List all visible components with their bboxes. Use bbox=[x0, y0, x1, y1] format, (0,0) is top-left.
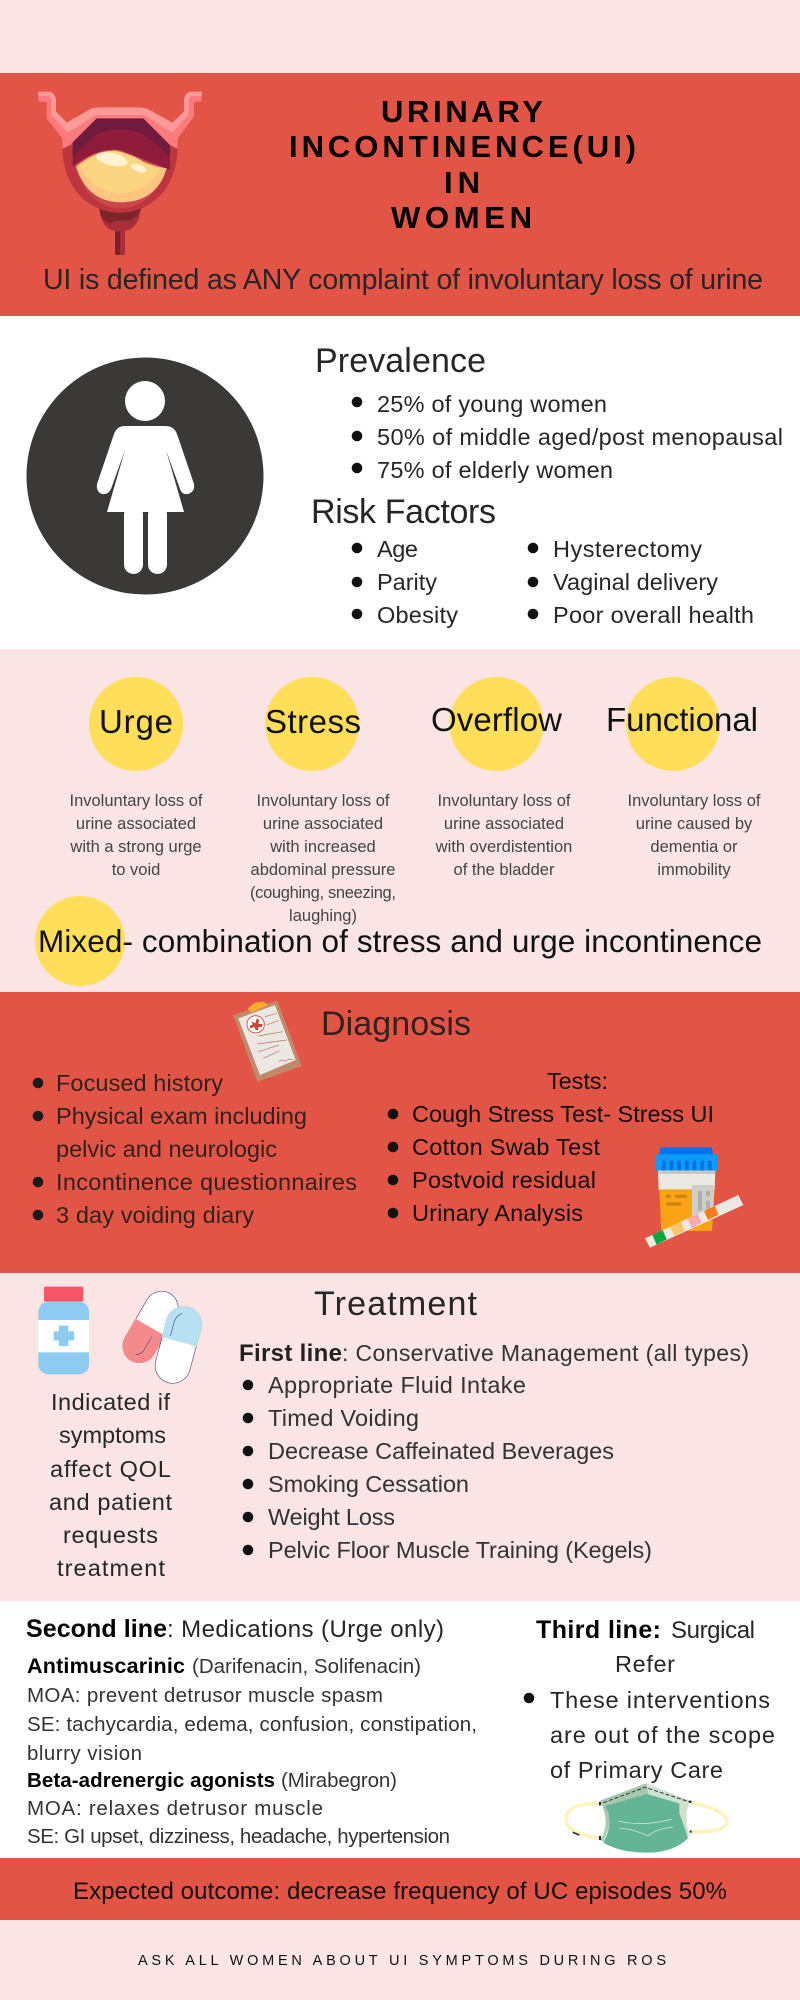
list: risk factors: Parity bbox=[377, 569, 437, 595]
third line: surgical refer: of Primary Care bbox=[550, 1757, 723, 1783]
text: indication for treatment: treatment bbox=[57, 1555, 165, 1581]
type: stress: with increased bbox=[269, 838, 376, 856]
icon: bladder bbox=[38, 92, 202, 255]
third line: surgical refer bbox=[524, 1616, 775, 1783]
type: urge: urine associated bbox=[76, 815, 196, 833]
type: stress bbox=[250, 677, 396, 925]
list: risk factors: Hysterectomy bbox=[553, 536, 702, 562]
type: functional: Functional bbox=[606, 701, 758, 738]
panel: title header bbox=[0, 73, 800, 316]
second line: medications: Second line bbox=[26, 1615, 167, 1643]
icon: medicine bottle bbox=[38, 1287, 89, 1374]
heading: diagnosis: Diagnosis bbox=[321, 1005, 471, 1043]
type: urge: Involuntary loss of bbox=[70, 792, 203, 810]
text: indication for treatment: Indicated if bbox=[51, 1389, 170, 1415]
title: WOMEN bbox=[391, 200, 532, 235]
type: urge: with a strong urge bbox=[69, 838, 202, 856]
third line: surgical refer: Surgical bbox=[671, 1617, 755, 1644]
list: tests: Cotton Swab Test bbox=[412, 1134, 600, 1160]
icon: urine cup with test strip bbox=[645, 1147, 743, 1248]
list: first line treatments: Appropriate Fluid Intake bbox=[268, 1372, 526, 1398]
type: overflow: Overflow bbox=[431, 701, 562, 738]
type: functional: urine caused by bbox=[636, 815, 753, 833]
panel: diagnosis bbox=[0, 992, 800, 1273]
type: urge: Urge bbox=[99, 703, 173, 740]
list: diagnosis steps: Incontinence questionnaires bbox=[56, 1169, 357, 1195]
type: overflow: urine associated bbox=[444, 815, 564, 833]
type: stress: (coughing, sneezing, bbox=[250, 884, 396, 902]
list: diagnosis steps: pelvic and neurologic bbox=[56, 1136, 277, 1162]
heading: treatment: Treatment bbox=[314, 1285, 478, 1323]
list: risk factors: Obesity bbox=[377, 602, 458, 628]
list: tests: Cough Stress Test- Stress UI bbox=[412, 1101, 714, 1127]
list: first line treatments bbox=[243, 1372, 652, 1563]
type: functional: Involuntary loss of bbox=[628, 792, 761, 810]
list: tests: Urinary Analysis bbox=[412, 1200, 583, 1226]
third line: surgical refer: These interventions bbox=[550, 1687, 770, 1713]
second line: medications: : Medications (Urge only) bbox=[167, 1616, 444, 1643]
second line: medications: SE: tachycardia, edema, confusion, constipation, bbox=[27, 1713, 477, 1736]
list: risk factors bbox=[352, 536, 754, 628]
third line: surgical refer: Third line: bbox=[536, 1616, 661, 1644]
third line: surgical refer: Refer bbox=[615, 1651, 675, 1677]
list: prevalence: 25% of young women bbox=[377, 391, 607, 417]
text: indication for treatment: affect QOL bbox=[50, 1456, 171, 1482]
list: diagnosis steps: Focused history bbox=[56, 1070, 223, 1096]
text: indication for treatment: requests bbox=[63, 1522, 158, 1548]
type: overflow: with overdistention bbox=[435, 838, 572, 856]
list: diagnosis steps: Physical exam including bbox=[56, 1103, 307, 1129]
list: prevalence: 50% of middle aged/post menopausal bbox=[377, 424, 783, 450]
type: urge: to void bbox=[112, 861, 160, 879]
second line: medications bbox=[26, 1615, 477, 1848]
type: stress: Involuntary loss of bbox=[257, 792, 390, 810]
type: stress: laughing) bbox=[289, 907, 357, 925]
icon: capsules bbox=[116, 1285, 206, 1387]
first line heading: First line bbox=[239, 1340, 342, 1367]
panel: footer bbox=[0, 1920, 800, 2000]
second line: medications: MOA: relaxes detrusor muscle bbox=[27, 1797, 323, 1820]
panel: second and third line treatment bbox=[0, 1601, 800, 1858]
text: indication for treatment: and patient bbox=[49, 1489, 172, 1515]
second line: medications: Beta-adrenergic agonists bbox=[27, 1769, 275, 1792]
type: functional: dementia or bbox=[650, 838, 738, 856]
text: indication for treatment: symptoms bbox=[59, 1422, 166, 1448]
type: stress: Stress bbox=[265, 703, 361, 740]
heading: risk factors: Risk Factors bbox=[311, 493, 496, 531]
list: first line treatments: Smoking Cessation bbox=[268, 1471, 469, 1497]
panel: top margin bbox=[0, 0, 800, 73]
list: first line treatments: Timed Voiding bbox=[268, 1405, 419, 1431]
third line: surgical refer: are out of the scope bbox=[550, 1722, 775, 1748]
icon: surgical mask bbox=[566, 1783, 727, 1853]
second line: medications: (Mirabegron) bbox=[281, 1769, 397, 1792]
panel: expected outcome banner bbox=[0, 1858, 800, 1920]
text: footer reminder: ASK ALL WOMEN ABOUT UI SYMPTOMS DURING ROS bbox=[138, 1953, 666, 1969]
text: expected outcome: Expected outcome: decrease frequency of UC episodes 50% bbox=[73, 1878, 727, 1905]
second line: medications: SE: GI upset, dizziness, headache, hypertension bbox=[27, 1825, 450, 1848]
type: functional: immobility bbox=[657, 861, 731, 879]
second line: medications: (Darifenacin, Solifenacin) bbox=[192, 1655, 421, 1678]
second line: medications: blurry vision bbox=[27, 1742, 142, 1765]
title bbox=[289, 94, 636, 235]
type: functional bbox=[606, 677, 761, 879]
type: mixed bbox=[35, 896, 762, 986]
type: urge bbox=[69, 677, 203, 879]
title: INCONTINENCE(UI) bbox=[289, 129, 636, 164]
icon: woman in circle bbox=[26, 358, 264, 594]
list: risk factors: Poor overall health bbox=[553, 602, 754, 628]
icon: clipboard bbox=[233, 1001, 302, 1082]
list: tests: Tests: bbox=[547, 1068, 608, 1094]
list: first line treatments: Decrease Caffeinated Beverages bbox=[268, 1438, 614, 1464]
list: first line treatments: Weight Loss bbox=[268, 1504, 395, 1530]
type: stress: urine associated bbox=[263, 815, 383, 833]
type: overflow bbox=[431, 677, 572, 879]
type: overflow: of the bladder bbox=[454, 861, 555, 879]
list: tests bbox=[388, 1068, 714, 1226]
heading: prevalence: Prevalence bbox=[315, 342, 486, 380]
list: diagnosis steps bbox=[33, 1070, 357, 1228]
list: first line treatments: Pelvic Floor Muscle Training (Kegels) bbox=[268, 1537, 652, 1563]
panel: first line treatment bbox=[0, 1273, 800, 1601]
list: diagnosis steps: 3 day voiding diary bbox=[56, 1202, 254, 1228]
title: URINARY bbox=[381, 94, 543, 129]
list: tests: Postvoid residual bbox=[412, 1167, 596, 1193]
list: risk factors: Vaginal delivery bbox=[553, 569, 718, 595]
type: stress: abdominal pressure bbox=[251, 861, 395, 879]
list: risk factors: Age bbox=[377, 536, 418, 562]
type: overflow: Involuntary loss of bbox=[438, 792, 571, 810]
first line heading: : Conservative Management (all types) bbox=[342, 1340, 749, 1366]
list: prevalence: 75% of elderly women bbox=[377, 457, 613, 483]
second line: medications: MOA: prevent detrusor muscle spasm bbox=[27, 1684, 383, 1707]
panel: types of incontinence bbox=[0, 649, 800, 992]
list: prevalence bbox=[352, 391, 783, 483]
definition text: UI is defined as ANY complaint of involuntary loss of urine bbox=[43, 264, 763, 296]
title: IN bbox=[444, 165, 480, 200]
type: mixed: Mixed- combination of stress and urge incontinence bbox=[38, 923, 762, 959]
panel: prevalence and risk factors bbox=[0, 316, 800, 649]
second line: medications: Antimuscarinic bbox=[27, 1654, 185, 1678]
text: indication for treatment bbox=[49, 1389, 172, 1581]
